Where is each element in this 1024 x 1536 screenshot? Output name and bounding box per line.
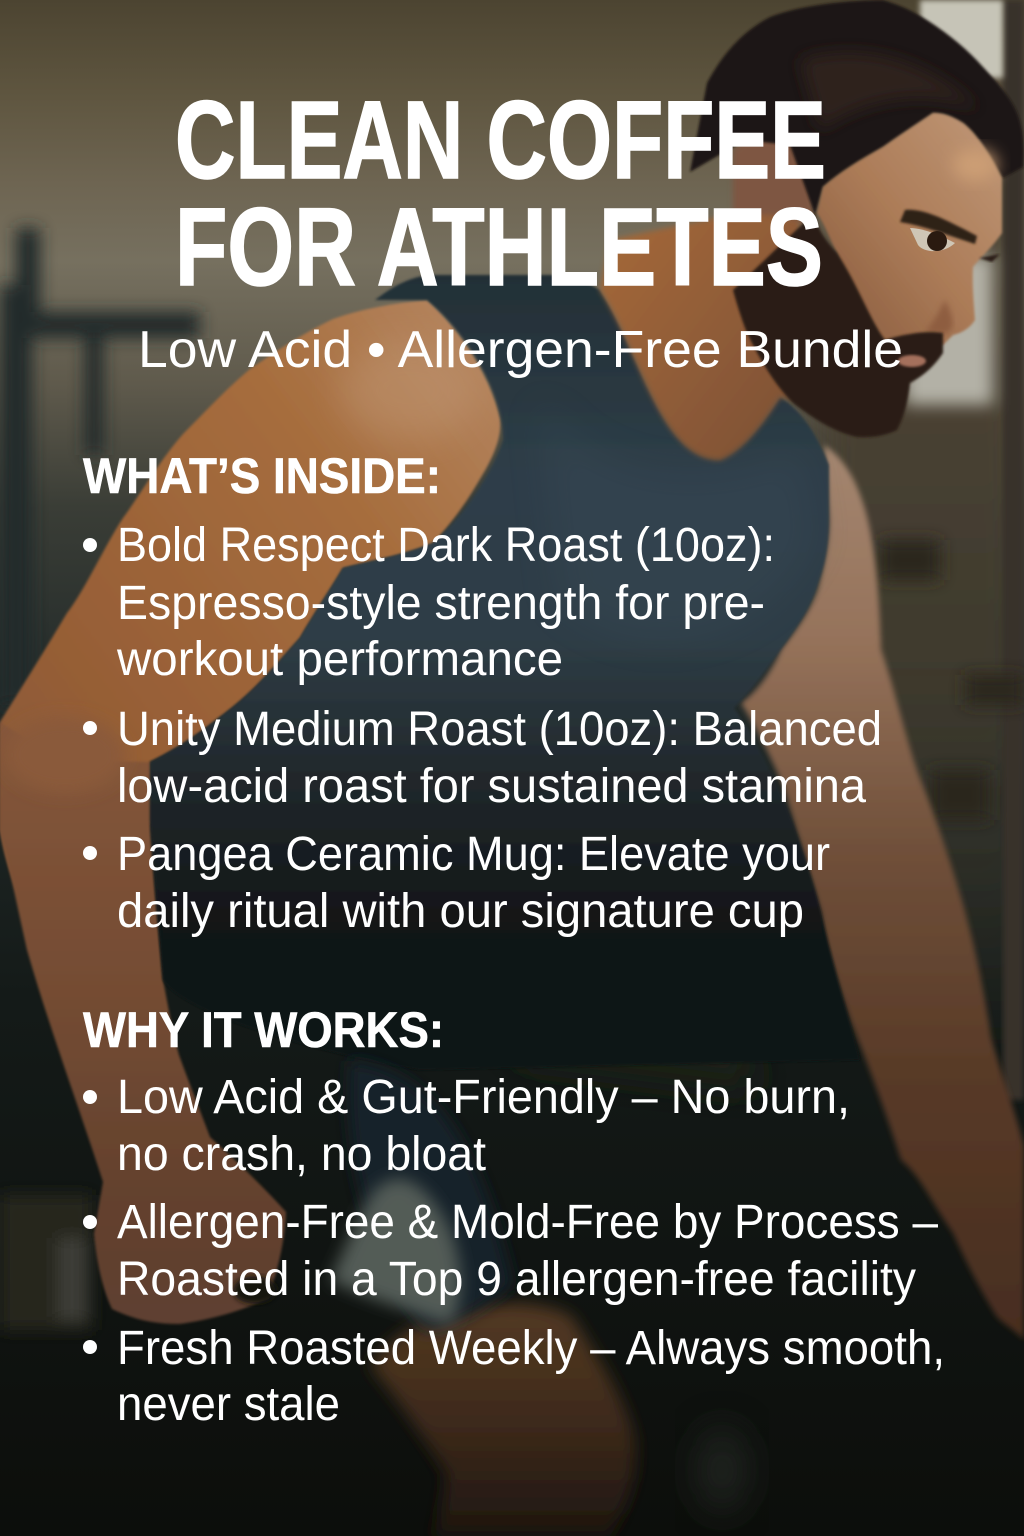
item: Bold Respect: Espresso-style strength for pre-	[117, 577, 765, 630]
ear	[733, 135, 817, 225]
title	[175, 79, 826, 309]
item: Allergen-Free: Allergen-Free & Mold-Free by Process –	[117, 1196, 938, 1249]
right arm	[741, 445, 1024, 1340]
item: Allergen-Free: Roasted in a Top 9 allergen-free facility	[117, 1253, 916, 1306]
item: Unity	[83, 703, 882, 813]
nose shadow	[925, 300, 952, 334]
item: Low Acid: no crash, no bloat	[117, 1128, 486, 1181]
blurred gym equipment: right wall shapes	[880, 540, 1024, 820]
fingers shadow	[233, 1276, 277, 1304]
dumbbell left of the fist	[0, 1195, 92, 1330]
shorts	[348, 1060, 513, 1330]
leg	[370, 1304, 635, 1536]
heading: what's inside: WHAT’S INSIDE:	[83, 448, 441, 504]
subtitle: Low Acid • Allergen-Free Bundle	[138, 321, 903, 379]
brow	[900, 210, 977, 244]
hair	[690, 0, 1023, 215]
item: Low Acid: Low Acid & Gut-Friendly – No burn,	[117, 1071, 850, 1124]
beard and moustache	[733, 213, 943, 437]
item: Pangea: Pangea Ceramic Mug: Elevate your	[117, 828, 830, 881]
elbow blend	[5, 717, 125, 793]
gym wall on the right	[820, 60, 1024, 1060]
item: Pangea	[83, 828, 830, 938]
forearm and fist	[0, 722, 286, 1324]
item: Allergen-Free	[83, 1196, 938, 1306]
title: FOR ATHLETES	[175, 186, 823, 309]
section: why it works	[83, 1002, 945, 1431]
item: Pangea: daily ritual with our signature cup	[117, 885, 804, 938]
neck and trapezius	[600, 200, 800, 460]
section: what's inside	[83, 448, 882, 938]
item: Low Acid	[83, 1071, 850, 1181]
shoulder highlight	[340, 340, 480, 440]
lips	[898, 355, 926, 367]
item: Bold Respect: Bold Respect Dark Roast (10oz):	[117, 519, 775, 572]
far eye lashes	[979, 254, 1000, 262]
wrist wrap towel	[330, 1179, 461, 1325]
eye	[910, 228, 955, 251]
forehead highlight	[953, 149, 997, 181]
item: Fresh Roasted	[83, 1322, 945, 1431]
face	[817, 113, 1002, 345]
item: Fresh Roasted: Fresh Roasted Weekly – Always smooth,	[117, 1322, 945, 1375]
item: Fresh Roasted: never stale	[117, 1378, 340, 1431]
title: CLEAN COFFEE	[175, 79, 826, 202]
item: Bold Respect: workout performance	[116, 633, 563, 686]
dim floor patches	[480, 960, 760, 1090]
item: Unity: Unity Medium Roast (10oz): Balanced	[117, 703, 882, 756]
left upper arm	[0, 300, 500, 960]
heading: why it works: WHY IT WORKS:	[83, 1002, 444, 1058]
bright windows	[920, 0, 1003, 78]
shirt lit folds	[540, 400, 815, 638]
item: Unity: low-acid roast for sustained stamina	[117, 760, 866, 813]
blurred gym equipment: left rack	[0, 228, 200, 705]
item: Bold Respect	[83, 519, 775, 686]
tank top	[150, 275, 860, 1070]
